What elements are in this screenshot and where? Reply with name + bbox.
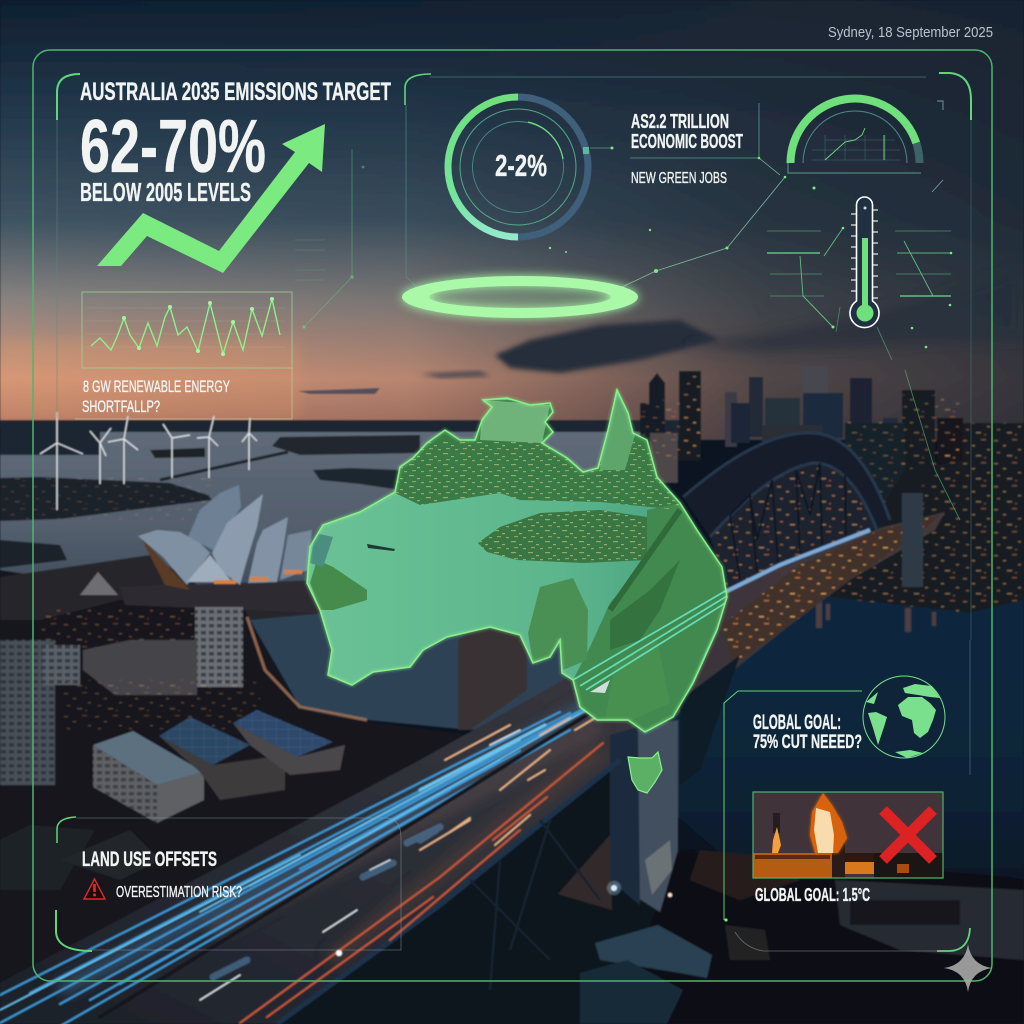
big number: 62-70% (80, 104, 266, 188)
distant shore and bay water (0, 420, 700, 622)
thermometer side charts (549, 157, 960, 520)
economic boost text: AS2.2 TRILLION (631, 111, 729, 133)
Australia map overlay (300, 385, 740, 793)
thermometer (850, 197, 879, 328)
Tasmania (628, 752, 662, 793)
panel: economy frame (405, 73, 971, 775)
harbour water east (660, 597, 1024, 880)
harbour bridge arch (683, 433, 890, 592)
land below the harbour (560, 850, 1024, 1024)
1.5 degree label: GLOBAL GOAL: 1.5°C (755, 885, 870, 905)
sub label: BELOW 2005 LEVELS (80, 177, 251, 207)
sky (0, 0, 1024, 440)
panel: global goal: 75% CUT NEEED? (753, 732, 862, 753)
central stone pylon (458, 628, 527, 730)
skyline towers (640, 366, 963, 505)
panel: land use offsets (56, 817, 401, 951)
opera house (80, 485, 320, 613)
western island (310, 560, 367, 610)
icon: green globe (863, 676, 945, 758)
panel title: LAND USE OFFSETS (82, 848, 217, 871)
chart caption: 8 GW RENEWABLE ENERGY (83, 377, 230, 396)
donut value: 2-2% (495, 148, 547, 183)
city lights on the land (395, 442, 679, 560)
economic boost text: NEW GREEN JOBS (631, 170, 727, 187)
lower truss and main pylon (277, 493, 923, 1024)
left city mass (0, 555, 470, 985)
panel: headline target (57, 74, 391, 418)
economic boost text: ECONOMIC BOOST (631, 131, 743, 153)
glowing halo ring (402, 276, 638, 318)
city blocks left (0, 607, 260, 785)
dateline: Sydney, 18 September 2025 (828, 24, 993, 41)
decorative data lines (295, 149, 364, 328)
deck of the bridge and far span (0, 512, 945, 1024)
rooftops beneath the bridge (580, 925, 770, 1024)
green trend arrow (97, 124, 325, 273)
dark clouds (298, 268, 1024, 394)
water below the map (247, 600, 640, 740)
icon: sparkle watermark (944, 944, 992, 992)
economic boost text (630, 103, 759, 187)
corner bracket (57, 74, 80, 120)
gauge (788, 99, 943, 192)
icon: warning triangle (84, 879, 105, 899)
panel: renewable energy shortfall chart: SHORTFALLP? (82, 397, 160, 416)
risk label: OVERESTIMATION RISK? (116, 884, 242, 901)
donut chart 2-2% (448, 97, 614, 237)
city east of bridge (827, 423, 1024, 615)
global goal text: GLOBAL GOAL: (753, 711, 841, 734)
headline label: AUSTRALIA 2035 EMISSIONS TARGET (80, 78, 391, 106)
wind turbines (40, 412, 257, 510)
photo: burning industry with red cross (753, 792, 943, 878)
traffic light trails (0, 700, 603, 1024)
chart box (75, 292, 292, 419)
harbour island (478, 510, 647, 563)
eastern land mass (573, 503, 727, 737)
north land mass (395, 400, 700, 510)
panel: renewable energy shortfall chart (75, 292, 292, 419)
warehouses with rooftops (0, 710, 345, 890)
icon: red cross (883, 810, 933, 860)
panel: global goal (724, 676, 970, 951)
